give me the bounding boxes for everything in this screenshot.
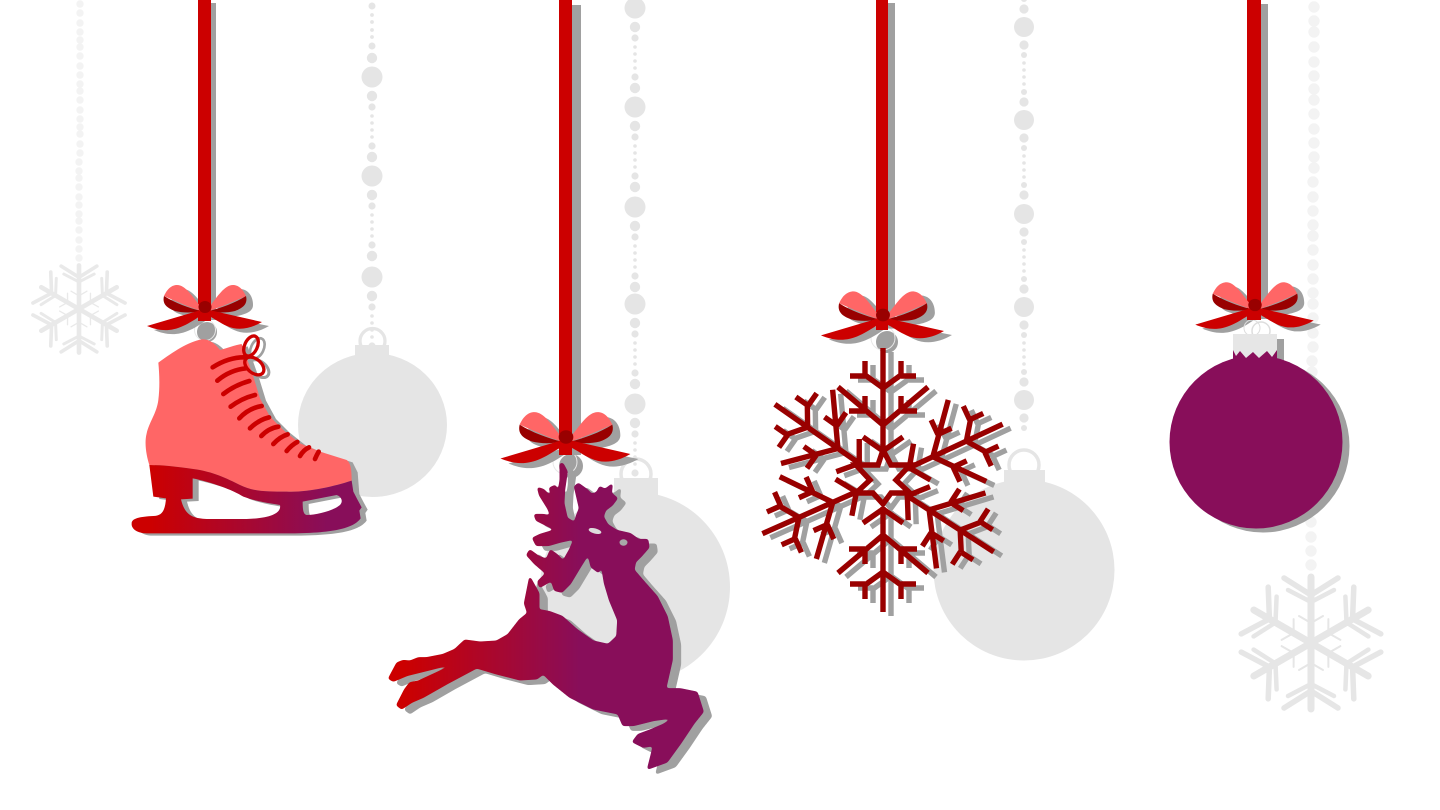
skate laces	[213, 334, 319, 459]
ornament: reindeer	[389, 0, 711, 773]
skate shadow	[138, 336, 368, 536]
reindeer antler gap	[588, 527, 602, 535]
reindeer eye	[620, 539, 628, 546]
bauble cap	[1233, 334, 1277, 358]
dotted chain: far left	[75, 0, 84, 262]
snowflake: large right	[1240, 577, 1382, 709]
dotted chain: fourth	[1014, 0, 1034, 431]
snowflake shadow	[752, 352, 1030, 616]
dotted chain: far right	[1305, 1, 1320, 571]
dotted chain: second	[362, 2, 382, 362]
grey bauble: behind skate	[298, 328, 447, 497]
snowflake body	[744, 348, 1022, 612]
bauble body	[1170, 356, 1342, 528]
grey bauble: behind snowflake	[934, 450, 1114, 660]
ornament: ice skate	[132, 0, 368, 536]
ribbon: snowflake	[821, 0, 952, 353]
ribbon: bauble	[1195, 0, 1321, 340]
reindeer silhouette	[389, 464, 703, 768]
ribbon: reindeer	[500, 0, 638, 478]
skate boot	[146, 339, 352, 492]
ribbon: skate	[147, 0, 269, 342]
skate blade	[132, 465, 362, 533]
ornament: red snowflake	[744, 0, 1030, 616]
bauble shadow	[1176, 339, 1350, 532]
snowflake: small left	[32, 265, 126, 353]
bauble neck	[1233, 348, 1277, 364]
ornament: purple bauble	[1170, 0, 1350, 532]
grey bauble: behind reindeer	[540, 459, 730, 682]
dotted chain: third	[624, 0, 646, 489]
reindeer shadow	[398, 469, 711, 773]
